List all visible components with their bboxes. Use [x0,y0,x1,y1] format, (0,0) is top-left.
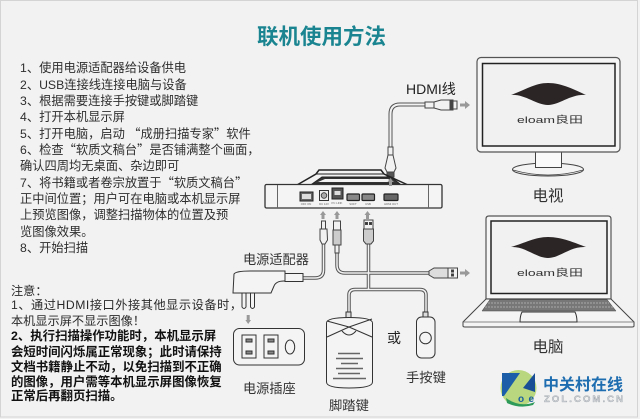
text block: usage steps: 上预览图像，调整扫描物体的位置及预 [20,207,228,222]
port labels [301,201,398,206]
laptop base [463,299,634,327]
connector: power plug [320,221,328,244]
text block: usage steps: 览图像效果。 [20,224,94,239]
watermark text: ZOL: ZOL.COM.CN [544,394,623,405]
text block: notes: 本机显示屏不显示图像！ [11,314,145,328]
text block: notes: 正常后再翻页扫描。 [11,388,123,403]
touchpad [520,312,577,322]
arrows: into ports [320,178,394,219]
text block: notes [11,283,242,403]
label: TV: 电视 [532,187,564,205]
logo swoosh [511,237,586,258]
text block: usage steps: 确认四周均无桌面、杂边即可 [20,159,179,173]
text block: usage steps: 7、将书籍或者卷宗放置于“软质文稿台” [20,173,247,191]
laptop lid [486,216,611,299]
text block: usage steps: 正中间位置；用户可在电脑或本机显示屏 [20,191,240,206]
port labels: DC 12V [319,202,329,206]
logo wordmark: eloam良田 [517,267,583,279]
text block: notes: 的图像，用户需等本机显示屏图像恢复 [11,374,222,389]
scanner body [265,184,442,208]
connector: USB-B plug [333,221,341,253]
text block: usage steps: 3、根据需要连接手按键或脚踏键 [20,93,198,108]
text block: notes: 注意： [11,283,48,298]
text block: usage steps: 5、打开电脑，启动 “成册扫描专家”软件 [20,124,251,142]
cables: power, USB to computer, footswitch and hand switch [302,243,429,313]
arrow: to TV [460,101,470,109]
text block: notes: 1、通过HDMI接口外接其他显示设备时， [11,297,242,312]
label: hand switch: 手按键 [406,370,446,385]
port labels: USB [365,202,371,206]
text block: usage steps: 2、USB连接线连接电脑与设备 [20,77,187,92]
port labels: HDMI OUT [384,202,398,206]
text block: notes: 2、执行扫描操作功能时，本机显示屏 [11,328,216,343]
icon: power adapter [233,271,303,308]
watermark logo: ZOL: oe [518,394,534,405]
connector: USB to computer [429,268,458,278]
label: HDMI cable: HDMI线 [406,81,456,97]
label: or: 或 [387,330,401,346]
monitor frame [477,58,620,152]
connector: USB-A plug [364,220,374,244]
icon: TV monitor [477,58,620,176]
label: computer: 电脑 [532,338,564,356]
device: scanner rear panel [265,170,442,208]
label: power adapter: 电源适配器 [243,252,309,267]
text block: usage steps: 6、检查“软质文稿台”是否铺满整个画面， [20,140,260,158]
text block: usage steps: 4、打开本机显示屏 [20,110,125,124]
text block: usage steps: 1、使用电源适配器给设备供电 [20,60,186,75]
icon: power socket [234,328,304,365]
watermark text: ZOL [543,375,623,405]
port labels: SOFT [349,202,357,206]
title: 联机使用方法 [257,24,386,49]
ports [300,188,398,201]
HDMI connector vertical [385,147,396,177]
HDMI connector horizontal [425,100,457,110]
watermark text: ZOL: 中关村在线 [543,375,623,394]
scanner stand [297,170,408,185]
logo wordmark: eloam良田 [517,114,583,126]
arrow: adapter to socket [245,315,251,324]
logo swoosh [511,83,586,105]
text block: notes: 文档书籍静止不动，以免扫描到不正确 [11,359,222,374]
text block: notes: 会短时间闪烁属正常现象；此时请保持 [11,344,222,359]
text block: usage steps: 8、开始扫描 [20,241,88,255]
keyboard [482,300,616,311]
label: foot pedal: 脚踏键 [329,398,369,413]
icon: hand switch [416,312,435,358]
HDMI cable [385,100,457,177]
port labels: OFF ON [301,202,311,206]
icon: foot pedal [326,312,372,388]
stand base [512,163,584,176]
text block: usage steps [20,60,260,255]
icon: laptop [463,216,634,327]
watermark logo: ZOL [500,370,536,407]
arrow: to laptop [460,269,470,277]
label: power socket: 电源插座 [243,381,296,396]
port labels: PC LINK [332,201,343,205]
